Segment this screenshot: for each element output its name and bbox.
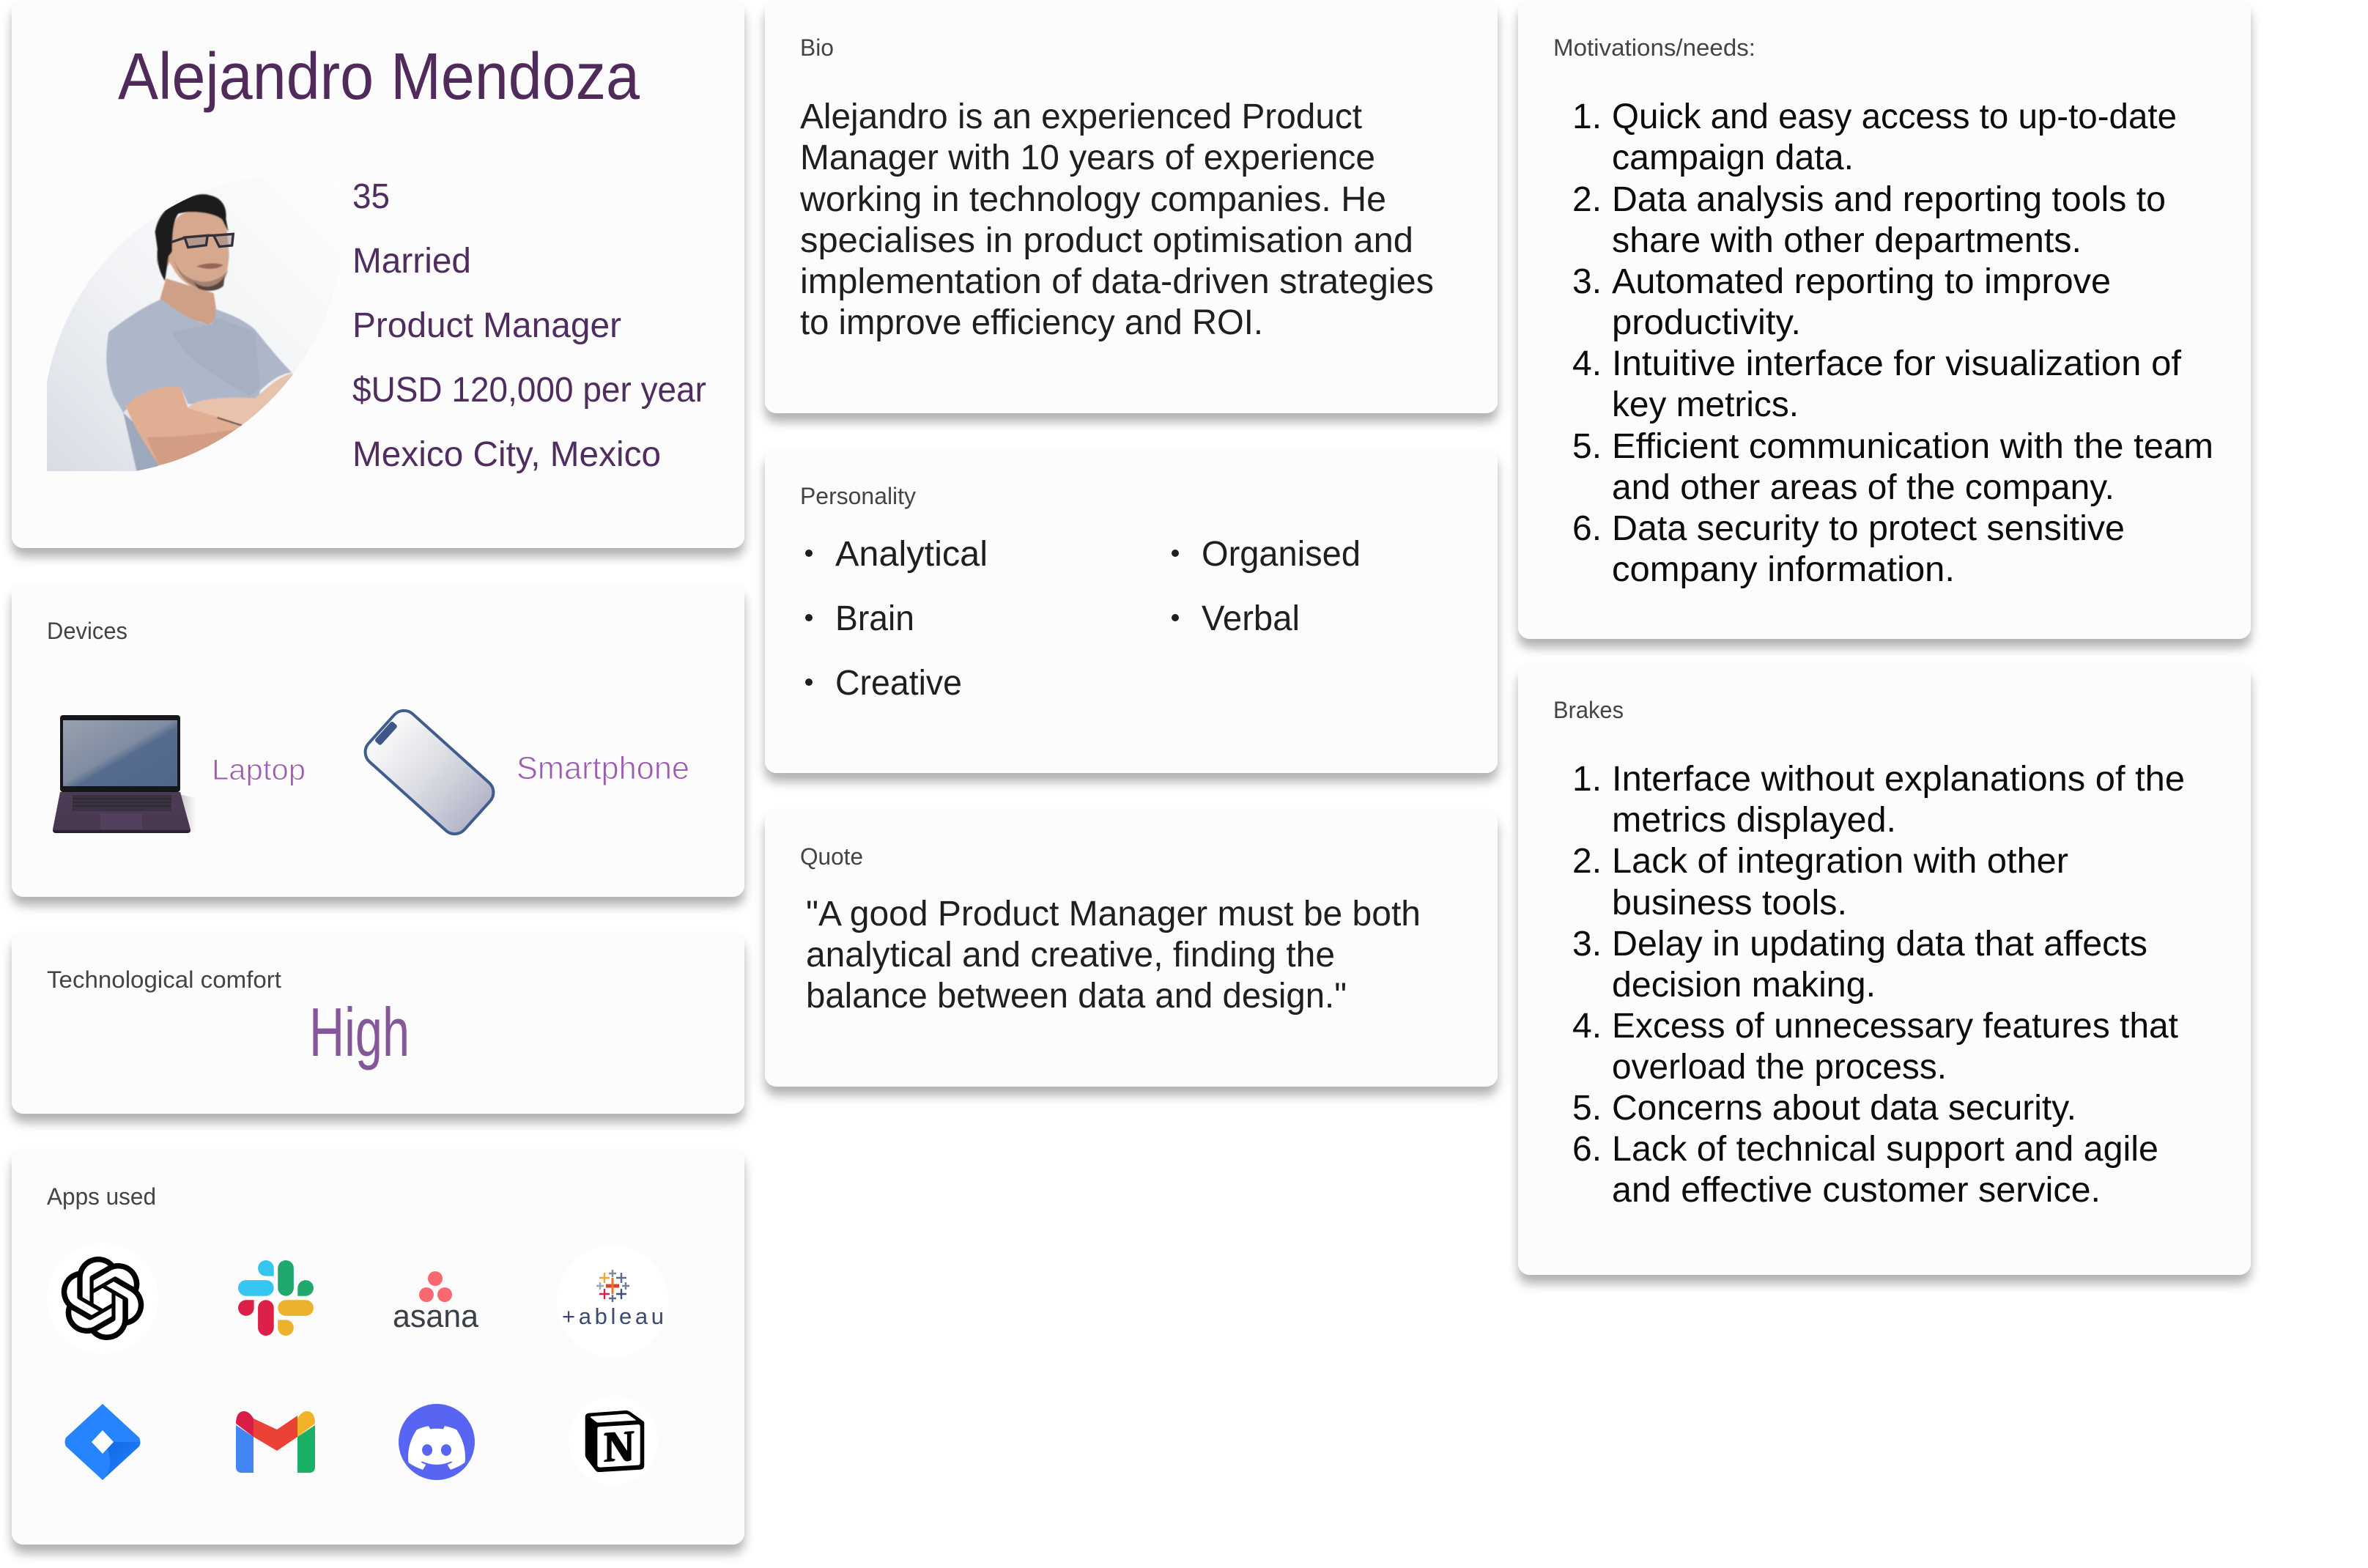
list: motivations: productivity. xyxy=(1612,303,1801,342)
text block: demographics: $USD 120,000 per year xyxy=(352,371,706,410)
heading: bio: Bio xyxy=(800,34,834,61)
icon: jira xyxy=(64,1404,141,1480)
list: motivations: share with other departments. xyxy=(1612,221,2082,260)
panel: apps used xyxy=(12,1149,744,1545)
title: persona name: Alejandro Mendoza xyxy=(118,40,640,114)
list: motivations: Quick and easy access to up-to-date xyxy=(1612,97,2177,136)
panel: motivations xyxy=(1518,0,2251,639)
list: brakes: Lack of technical support and agile xyxy=(1612,1130,2158,1169)
icon: notion xyxy=(569,1396,658,1485)
list: motivations: 6. xyxy=(1572,509,1602,548)
list: brakes: decision making. xyxy=(1612,966,1876,1005)
value: high: High xyxy=(309,994,410,1070)
heading: motivations: Motivations/needs: xyxy=(1553,34,1755,61)
heading: apps used: Apps used xyxy=(47,1183,156,1210)
text block: biography xyxy=(799,97,1434,342)
list: motivations: Data analysis and reporting tools to xyxy=(1612,180,2166,219)
list: brakes: 2. xyxy=(1572,842,1602,881)
icon: slack xyxy=(238,1260,314,1336)
list: motivations: 3. xyxy=(1572,262,1602,301)
icon: smartphone xyxy=(360,705,499,840)
text block: demographics: Product Manager xyxy=(352,306,621,345)
text block: demographics: Married xyxy=(352,242,471,281)
text block: demographics: Mexico City, Mexico xyxy=(352,435,661,474)
text block: biography: working in technology companies. He xyxy=(799,180,1386,219)
icon: laptop xyxy=(53,715,196,833)
list: traits left column xyxy=(805,535,988,703)
panel: brakes xyxy=(1518,664,2251,1275)
text block: quotation: "A good Product Manager must be both xyxy=(806,895,1421,933)
text block: biography: implementation of data-driven strategies xyxy=(800,262,1434,301)
text block: quotation: analytical and creative, finding the xyxy=(806,936,1335,975)
icon: tableau xyxy=(557,1246,668,1357)
icon: gmail xyxy=(236,1411,315,1473)
list: motivations: 5. xyxy=(1572,427,1602,466)
label: smartphone: Smartphone xyxy=(517,750,689,786)
text block: biography: Alejandro is an experienced Product xyxy=(800,97,1362,136)
photo: portrait xyxy=(47,193,293,471)
list: motivations: and other areas of the company. xyxy=(1612,468,2114,507)
list: brakes: overload the process. xyxy=(1612,1048,1947,1087)
list: traits right column xyxy=(1172,535,1361,638)
list: brakes: 6. xyxy=(1572,1130,1602,1169)
icon: discord xyxy=(399,1404,475,1480)
panel: personality xyxy=(765,448,1498,773)
list: brakes: Interface without explanations of the xyxy=(1612,760,2185,799)
heading: technological comfort: Technological comfort xyxy=(47,966,281,993)
text block: quotation: balance between data and design." xyxy=(806,977,1347,1016)
text block: biography: Manager with 10 years of experience xyxy=(800,138,1375,177)
list: motivations: key metrics. xyxy=(1612,385,1799,424)
list: brakes: metrics displayed. xyxy=(1612,801,1896,840)
list: brakes: 5. xyxy=(1572,1089,1602,1128)
list: motivations xyxy=(1572,97,2213,589)
list: traits left column: Creative xyxy=(835,664,962,703)
list: motivations: 1. xyxy=(1572,97,1602,136)
list: brakes: Lack of integration with other xyxy=(1612,842,2068,881)
list: brakes: and effective customer service. xyxy=(1612,1171,2101,1210)
icon: tableau: +ableau xyxy=(562,1303,664,1329)
list: brakes: business tools. xyxy=(1612,884,1847,922)
text block: demographics xyxy=(352,177,706,474)
list: motivations: 4. xyxy=(1572,344,1602,383)
list: motivations: Intuitive interface for visualization of xyxy=(1612,344,2182,383)
list: traits right column: Organised xyxy=(1202,535,1361,574)
list: motivations: campaign data. xyxy=(1612,138,1854,177)
text block: biography: to improve efficiency and ROI. xyxy=(800,303,1263,342)
text block: quotation xyxy=(806,895,1421,1016)
list: brakes: Delay in updating data that affects xyxy=(1612,925,2147,964)
list: traits right column: Verbal xyxy=(1202,599,1300,638)
list: traits left column: Brain xyxy=(835,599,914,638)
icon: asana: asana xyxy=(393,1298,479,1334)
text block: demographics: 35 xyxy=(352,177,390,216)
list: brakes: 1. xyxy=(1572,760,1602,799)
panel: quote xyxy=(765,810,1498,1087)
heading: devices: Devices xyxy=(47,618,127,644)
label: laptop: Laptop xyxy=(212,754,306,786)
list: brakes: 3. xyxy=(1572,925,1602,964)
list: brakes: Concerns about data security. xyxy=(1612,1089,2076,1128)
list: brakes: 4. xyxy=(1572,1007,1602,1046)
panel: devices xyxy=(12,583,744,897)
icon: asana xyxy=(393,1271,479,1334)
list: brakes xyxy=(1572,760,2185,1210)
list: brakes: Excess of unnecessary features that xyxy=(1612,1007,2178,1046)
heading: brakes: Brakes xyxy=(1553,697,1624,723)
list: motivations: Data security to protect sensitive xyxy=(1612,509,2125,548)
list: motivations: company information. xyxy=(1612,550,1955,589)
text block: biography: specialises in product optimisation and xyxy=(800,221,1413,260)
panel: technological comfort xyxy=(12,932,744,1114)
list: motivations: Efficient communication with the team xyxy=(1612,427,2213,466)
list: motivations: Automated reporting to improve xyxy=(1612,262,2111,301)
list: motivations: 2. xyxy=(1572,180,1602,219)
panel: profile xyxy=(12,0,744,548)
panel: bio xyxy=(765,0,1498,413)
heading: personality: Personality xyxy=(800,483,916,509)
heading: quote: Quote xyxy=(800,843,863,870)
list: traits left column: Analytical xyxy=(835,535,988,574)
icon: chatgpt xyxy=(47,1243,158,1354)
